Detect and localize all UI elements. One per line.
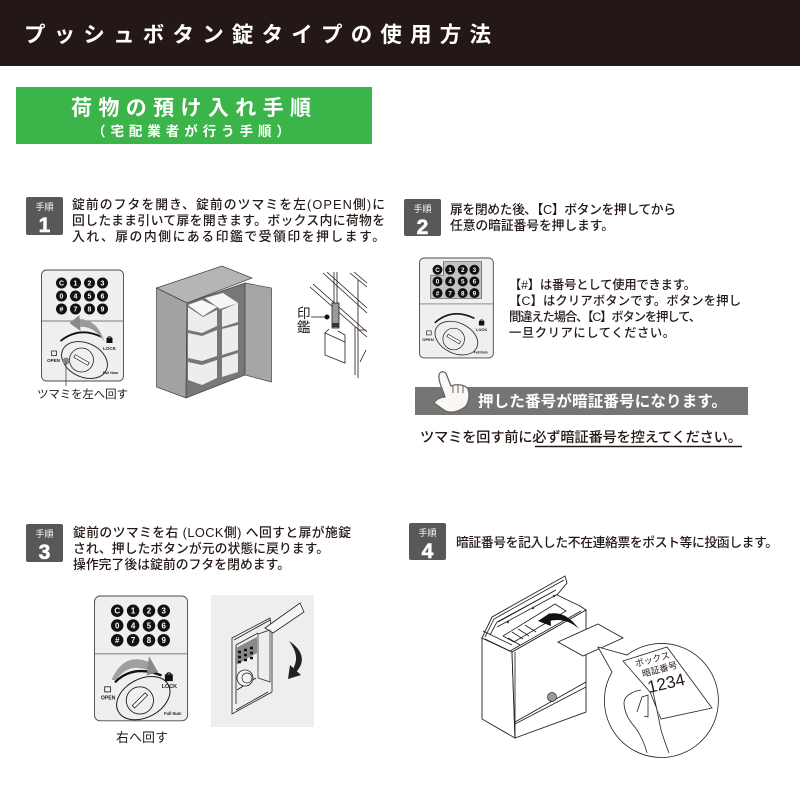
icon: pointing hand <box>434 372 469 412</box>
keypad lock with highlighted buttons: 1 <box>448 267 452 274</box>
keypad lock with highlighted buttons <box>420 258 493 361</box>
keypad lock with highlighted buttons: Full Num <box>474 350 488 354</box>
keypad lock turning left: 6 <box>101 294 105 300</box>
pointer to knob <box>62 358 70 386</box>
keypad lock turning right: C <box>114 607 120 616</box>
magnified slip with code: 1234 <box>646 670 687 697</box>
keypad lock with highlighted buttons: C <box>435 267 440 274</box>
keypad lock turning right: # <box>115 636 120 645</box>
lid closing illustration <box>211 595 314 727</box>
step 4 badge: 4 <box>422 540 434 563</box>
keypad lock with highlighted buttons: # <box>436 290 440 297</box>
step 4 badge: 手順 <box>418 527 437 538</box>
keypad lock turning right: 5 <box>147 621 152 630</box>
keypad lock turning left: 2 <box>88 280 92 288</box>
section heading: green banner: （宅配業者が行う手順） <box>92 123 290 139</box>
magnified slip with code: 暗証番号 <box>641 659 678 679</box>
delivery slip card <box>558 624 623 656</box>
keypad lock turning left: # <box>60 306 64 314</box>
step 2 instructions: 任意の暗証番号を押します。 <box>450 218 614 233</box>
panel: step 3 <box>26 524 351 745</box>
keypad lock turning left: 9 <box>101 306 105 314</box>
step 1 instructions: 入れ、扉の内側にある印鑑で受領印を押します。 <box>72 229 385 244</box>
cabinet with parcels <box>156 266 272 398</box>
keypad lock turning left: 4 <box>74 294 78 300</box>
notes on number use <box>509 277 741 340</box>
step 2 instructions <box>450 202 676 233</box>
notes on number use: 【#】は番号として使用できます。 <box>509 277 696 292</box>
notes on number use: 一旦クリアにしてください。 <box>509 326 675 340</box>
keypad lock with highlighted buttons: 9 <box>473 290 477 297</box>
keypad lock with highlighted buttons: 4 <box>448 279 452 286</box>
stamp label: 印 <box>297 306 310 321</box>
notes on number use: 【C】はクリアボタンです。ボタンを押し <box>509 294 741 308</box>
step 2 badge: 2 <box>417 216 428 239</box>
step 1 instructions: 錠前のフタを開き、錠前のツマミを左(OPEN側)に <box>72 197 385 212</box>
keypad lock with highlighted buttons: 6 <box>473 279 477 286</box>
step 2 badge <box>404 199 441 239</box>
step 3 badge <box>26 524 63 564</box>
magnified slip with code <box>598 643 718 757</box>
step 1 instructions: 回したまま引いて扉を開きます。ボックス内に荷物を <box>72 213 385 228</box>
panel: step 4 <box>409 523 778 757</box>
keypad lock turning left: LOCK <box>103 346 117 351</box>
keypad lock with highlighted buttons: 5 <box>461 279 465 286</box>
stamp illustration <box>310 272 367 378</box>
magnified slip with code: ボックス <box>634 650 671 669</box>
keypad lock with highlighted buttons: 8 <box>461 290 465 297</box>
section heading: green banner <box>16 87 372 144</box>
keypad lock turning right: 3 <box>162 607 167 616</box>
keypad lock turning right: LOCK <box>162 684 177 690</box>
header bar <box>0 0 800 66</box>
keypad caption: ツマミを左へ回す <box>37 387 128 401</box>
keypad lock turning right: 6 <box>162 621 167 630</box>
keypad lock with highlighted buttons: 0 <box>436 279 440 286</box>
panel: step 2 <box>404 199 748 446</box>
panel: step 1 <box>26 197 385 401</box>
keypad lock turning left: 5 <box>88 294 92 300</box>
keypad lock turning left: Full Num <box>103 371 118 375</box>
keypad lock turning right: 1 <box>131 607 136 616</box>
step 1 instructions <box>72 197 385 244</box>
step 1 badge <box>26 197 63 237</box>
keypad lock turning right: 7 <box>131 636 136 645</box>
keypad lock turning right: OPEN <box>101 695 116 701</box>
step 1 badge: 1 <box>39 214 51 237</box>
keypad lock turning right: 8 <box>147 636 152 645</box>
step 2 badge: 手順 <box>413 203 432 214</box>
keypad lock turning right: Full Num <box>164 711 182 716</box>
section heading: green banner: 荷物の預け入れ手順 <box>71 97 311 120</box>
keypad lock turning right: 0 <box>115 621 120 630</box>
warning note: ツマミを回す前に必ず暗証番号を控えてください。 <box>420 429 742 446</box>
keypad lock with highlighted buttons: LOCK <box>476 327 487 332</box>
step 4 badge <box>409 523 446 563</box>
keypad lock turning left <box>42 270 124 386</box>
step 3 instructions: され、押したボタンが元の状態に戻ります。 <box>73 541 329 556</box>
step 3 instructions <box>73 525 351 572</box>
keypad lock with highlighted buttons: 2 <box>461 267 465 274</box>
keypad lock turning left: 1 <box>74 280 78 288</box>
keypad lock turning right <box>94 596 188 729</box>
stamp label: 鑑 <box>297 319 311 335</box>
step 4 instructions: 暗証番号を記入した不在連絡票をポスト等に投函します。 <box>456 535 778 550</box>
step 2 instructions: 扉を閉めた後､【C】ボタンを押してから <box>450 202 676 217</box>
callout banner: 押した番号が暗証番号になります。 <box>478 392 727 410</box>
keypad lock turning left: 0 <box>60 294 64 300</box>
step 3 badge: 手順 <box>35 528 54 539</box>
mailbox illustration <box>482 576 586 738</box>
keypad caption: 右へ回す <box>116 730 168 745</box>
keypad lock with highlighted buttons: OPEN <box>422 337 434 342</box>
step 3 instructions: 錠前のツマミを右 (LOCK側) へ回すと扉が施錠 <box>73 525 351 540</box>
keypad lock turning right: 9 <box>162 636 167 645</box>
keypad lock with highlighted buttons: 3 <box>473 267 477 274</box>
step 1 badge: 手順 <box>35 201 54 212</box>
step 3 instructions: 操作完了後は錠前のフタを閉めます。 <box>73 557 290 572</box>
keypad lock turning left: 8 <box>88 306 92 314</box>
keypad lock turning left: C <box>59 280 64 288</box>
callout banner <box>415 387 748 415</box>
keypad lock turning left: 7 <box>74 306 78 314</box>
notes on number use: 間違えた場合、【C】ボタンを押して、 <box>509 309 701 324</box>
keypad lock with highlighted buttons: 7 <box>448 290 452 297</box>
header bar: プッシュボタン錠タイプの使用方法 <box>24 23 491 47</box>
keypad lock turning left: OPEN <box>47 358 60 363</box>
keypad lock turning left: 3 <box>101 280 105 288</box>
keypad lock turning right: 2 <box>147 607 152 616</box>
stamp label <box>297 306 330 335</box>
keypad lock turning right: 4 <box>131 621 136 630</box>
step 3 badge: 3 <box>39 541 50 564</box>
